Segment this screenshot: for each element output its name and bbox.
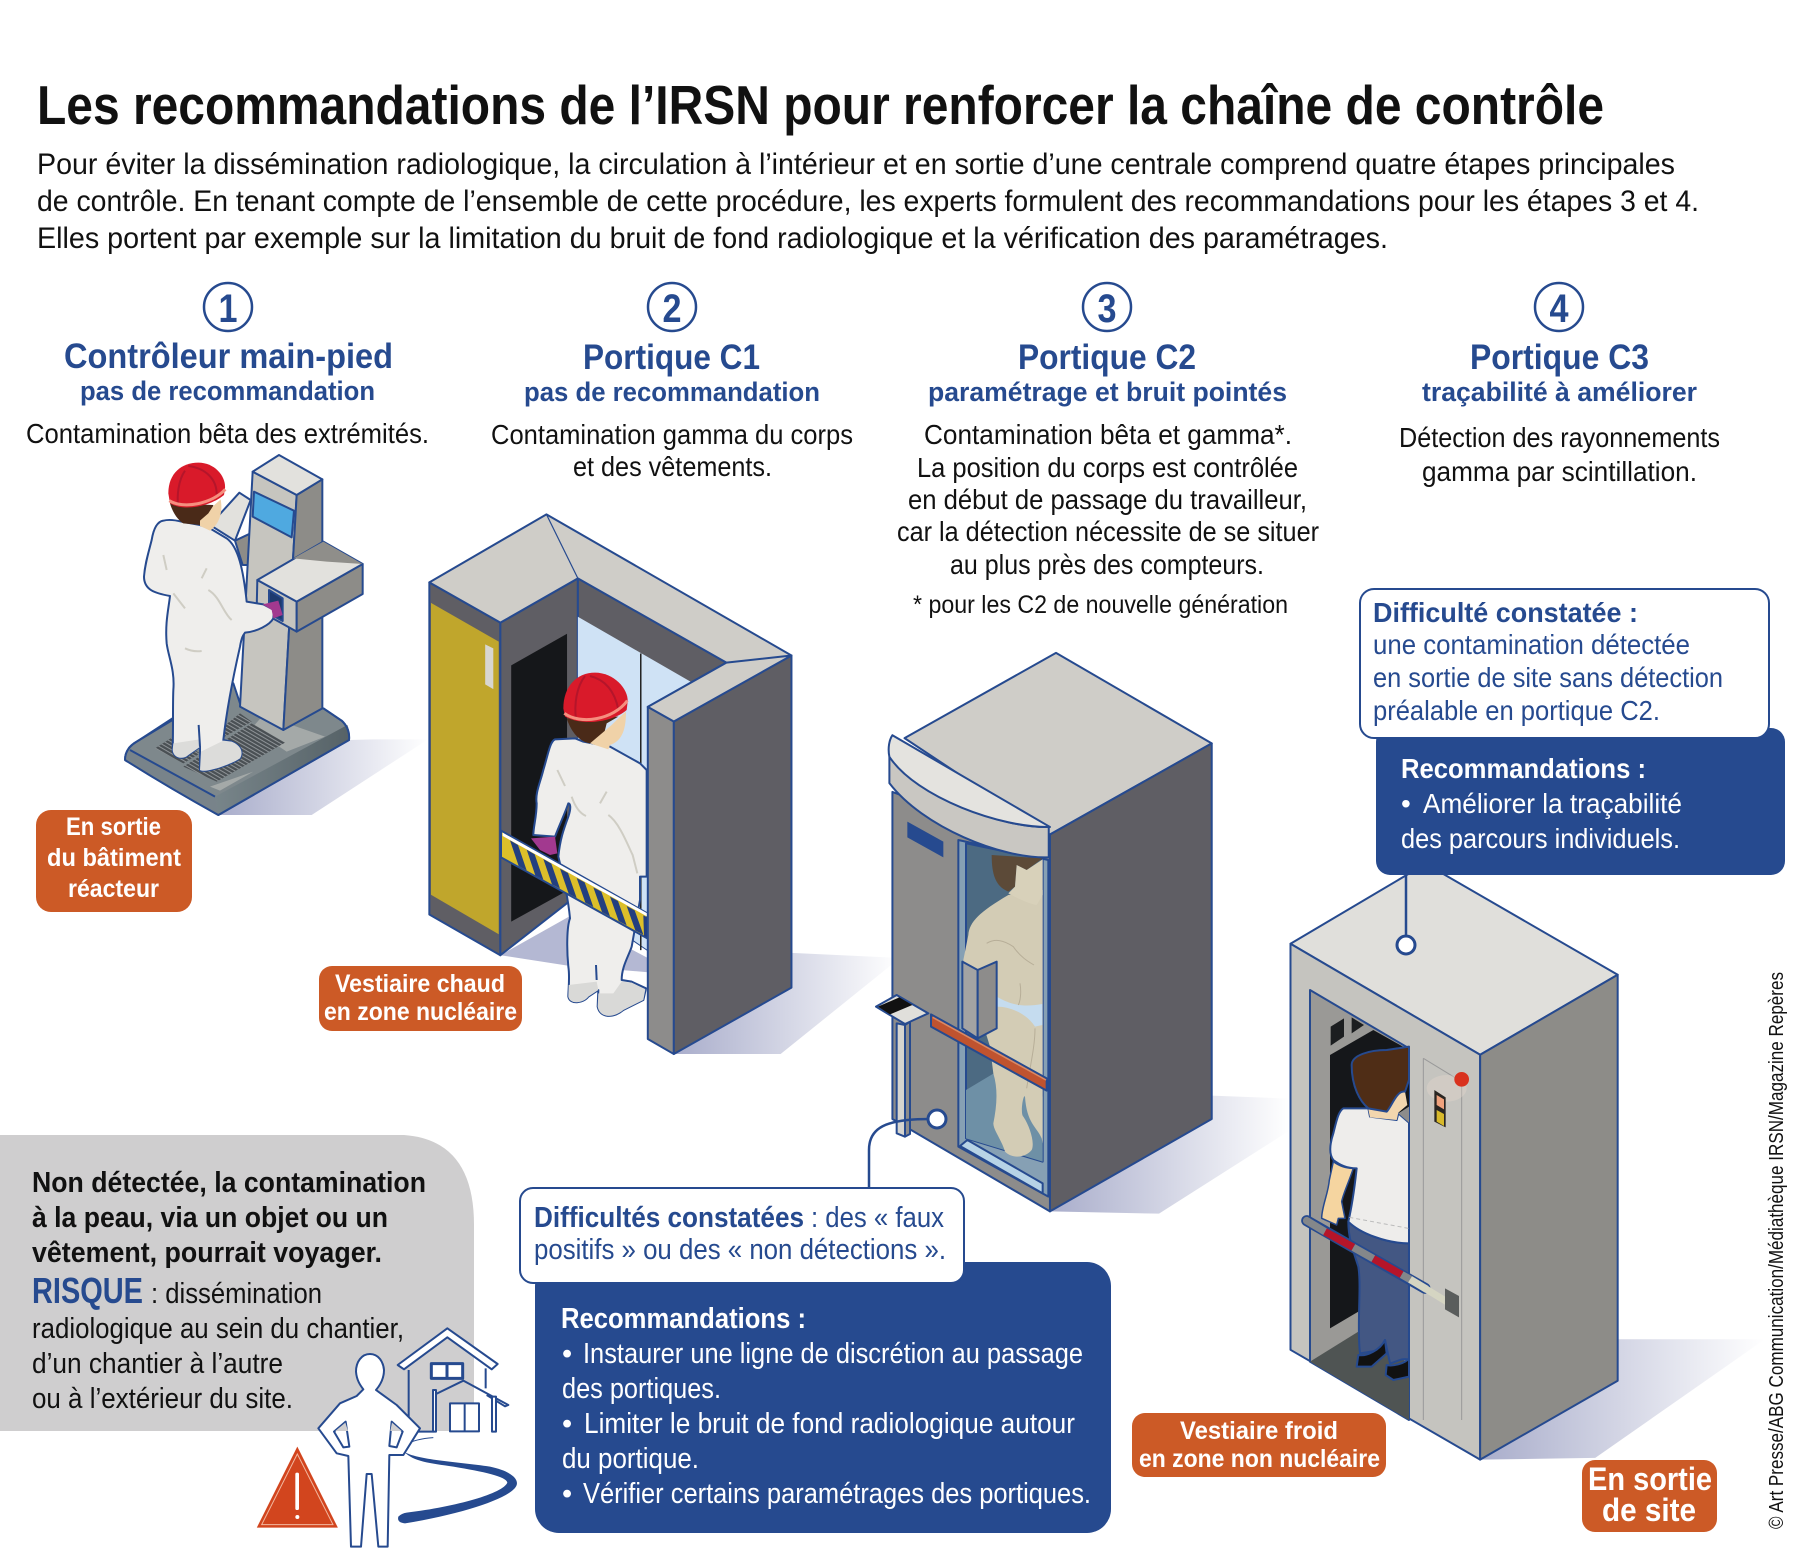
difficulty callout C2 [520, 1188, 964, 1283]
panel: risk: : dissémination [151, 1278, 322, 1310]
recommendations box C3: Améliorer la traçabilité [1423, 788, 1682, 819]
step 2 heading: pas de recommandation [524, 377, 820, 407]
recommendations box C3: • [1401, 788, 1411, 819]
recommendations box C2: • [562, 1338, 572, 1370]
badge: Vestiaire froid en zone non nucléaire: Vestiaire froid [1180, 1417, 1338, 1445]
illustration: hand-foot contamination monitor with worker [125, 455, 428, 815]
canopy C2 [889, 735, 1050, 857]
panel: risk: radiologique au sein du chantier, [32, 1313, 404, 1345]
recommendations box C3: des parcours individuels. [1401, 823, 1680, 854]
intro text: Pour éviter la dissémination radiologique, la circulation à l’intérieur et en sortie d’une centrale comprend quatre étapes principales [37, 148, 1675, 181]
step 4 heading: gamma par scintillation. [1422, 456, 1697, 487]
portal C2 body [892, 653, 1289, 1214]
recommendations box C2: Instaurer une ligne de discrétion au passage [583, 1338, 1083, 1370]
panel: risk [0, 1135, 474, 1431]
panel: risk: d’un chantier à l’autre [32, 1348, 283, 1380]
recommendations box C2: Recommandations : [561, 1303, 806, 1335]
callout marker C2 [928, 1110, 946, 1128]
recommendations box C2: des portiques. [562, 1373, 721, 1405]
step 3 heading: Portique C2 [1018, 338, 1196, 377]
step 1 heading: Contamination bêta des extrémités. [26, 418, 429, 449]
recommendations box C3 [1376, 728, 1785, 875]
step 1 heading [26, 283, 429, 449]
step 2 heading: Contamination gamma du corps [491, 419, 853, 450]
step 3 heading: en début de passage du travailleur, [908, 484, 1307, 515]
connector line to callout C2 [869, 1119, 930, 1190]
recommendations box C3: Recommandations : [1401, 753, 1646, 784]
step 1 heading: Contrôleur main-pied [64, 337, 393, 376]
portal C3 body [1290, 864, 1765, 1460]
difficulty callout C3: une contamination détectée [1373, 629, 1690, 660]
badge: En sortie de site [1582, 1460, 1717, 1532]
intro text [37, 148, 1699, 255]
glass cabin with person and detector [907, 822, 1048, 1197]
recommendations box C2: • [562, 1408, 572, 1440]
panel: risk: ou à l’extérieur du site. [32, 1383, 293, 1415]
connector line C3 [1405, 875, 1407, 937]
difficulty callout C3: en sortie de site sans détection [1373, 662, 1723, 693]
portal C1 back structure [429, 514, 900, 1054]
badge: Vestiaire chaud en zone nucléaire [319, 966, 522, 1031]
badge: En sortie de site: de site [1602, 1492, 1696, 1528]
step 2 heading: 2 [662, 287, 682, 331]
difficulty callout C2: positifs » ou des « non détections ». [534, 1234, 946, 1266]
step 4 heading: traçabilité à améliorer [1422, 377, 1697, 407]
recommendations box C2: du portique. [562, 1443, 699, 1475]
step 1 heading: 1 [218, 287, 238, 331]
illustration: portal C2 with person [869, 653, 1289, 1214]
badge: En sortie du bâtiment réacteur [36, 810, 192, 912]
intro text: Elles portent par exemple sur la limitation du bruit de fond radiologique et la vérification des paramétrages. [37, 222, 1388, 255]
badge reader and red barrier C2 [876, 995, 1047, 1137]
difficulty callout C2: Difficultés constatées [534, 1202, 804, 1234]
callout marker C3 [1397, 936, 1415, 954]
recommendations box C2: Limiter le bruit de fond radiologique autour [584, 1408, 1075, 1440]
credit: © Art Presse/ABG Communication/Médiathèque IRSN/Magazine Repères [1766, 972, 1788, 1529]
badge: En sortie de site: En sortie [1588, 1461, 1712, 1497]
step 3 heading: paramétrage et bruit pointés [928, 377, 1287, 407]
illustration: portal C1 with worker [429, 514, 900, 1054]
recommendations box C2: Vérifier certains paramétrages des portiques. [583, 1478, 1091, 1510]
badge: Vestiaire chaud en zone nucléaire: Vestiaire chaud [335, 970, 505, 998]
step 2 heading: et des vêtements. [573, 451, 772, 482]
step 3 heading: 3 [1098, 287, 1116, 331]
badge: Vestiaire froid en zone non nucléaire: en zone non nucléaire [1139, 1445, 1380, 1473]
opening with person and barrier C3 [1307, 990, 1469, 1420]
recommendations box C2: • [562, 1478, 572, 1510]
step 1 heading: pas de recommandation [80, 376, 375, 406]
title: Les recommandations de l’IRSN pour renforcer la chaîne de contrôle [37, 74, 1604, 136]
badge: Vestiaire chaud en zone nucléaire: en zone nucléaire [324, 998, 517, 1026]
difficulty callout C3: préalable en portique C2. [1373, 695, 1660, 726]
panel: risk: vêtement, pourrait voyager. [32, 1237, 382, 1269]
panel: risk: à la peau, via un objet ou un [32, 1202, 388, 1234]
step 3 heading: Contamination bêta et gamma*. [924, 419, 1292, 450]
badge: Vestiaire froid en zone non nucléaire [1132, 1413, 1386, 1477]
step 4 heading: Portique C3 [1470, 338, 1649, 377]
panel: risk: RISQUE [32, 1270, 143, 1311]
step 3 heading: au plus près des compteurs. [950, 549, 1264, 580]
difficulty callout C2: : des « faux [811, 1202, 944, 1234]
step 4 heading: Détection des rayonnements [1399, 422, 1720, 453]
step 2 heading [491, 283, 853, 482]
icon: warning triangle [257, 1447, 337, 1527]
step 3 heading: La position du corps est contrôlée [917, 452, 1298, 483]
intro text: de contrôle. En tenant compte de l’ensemble de cette procédure, les experts formulent des recommandations pour les étapes 3 et 4. [37, 185, 1699, 218]
badge: En sortie du bâtiment réacteur: réacteur [68, 875, 159, 903]
step 3 heading: * pour les C2 de nouvelle génération [913, 591, 1288, 619]
worker and striped barrier C1 [501, 673, 647, 1016]
panel: risk: Non détectée, la contamination [32, 1167, 426, 1199]
step 4 heading: 4 [1550, 287, 1569, 331]
difficulty callout C3: Difficulté constatée : [1373, 597, 1638, 628]
illustration: portal C3 with person [1290, 864, 1765, 1460]
step 3 heading: car la détection nécessite de se situer [897, 516, 1319, 547]
badge: En sortie du bâtiment réacteur: En sortie [66, 813, 161, 841]
step 3 heading [897, 283, 1319, 619]
badge: En sortie du bâtiment réacteur: du bâtiment [47, 844, 182, 872]
recommendations box C2 [535, 1262, 1111, 1533]
step 4 heading [1399, 283, 1720, 487]
difficulty callout C3 [1360, 589, 1769, 738]
step 2 heading: Portique C1 [583, 338, 760, 377]
portal C1 right pillar [648, 655, 791, 1054]
icon: house, person and pathway [318, 1328, 517, 1547]
